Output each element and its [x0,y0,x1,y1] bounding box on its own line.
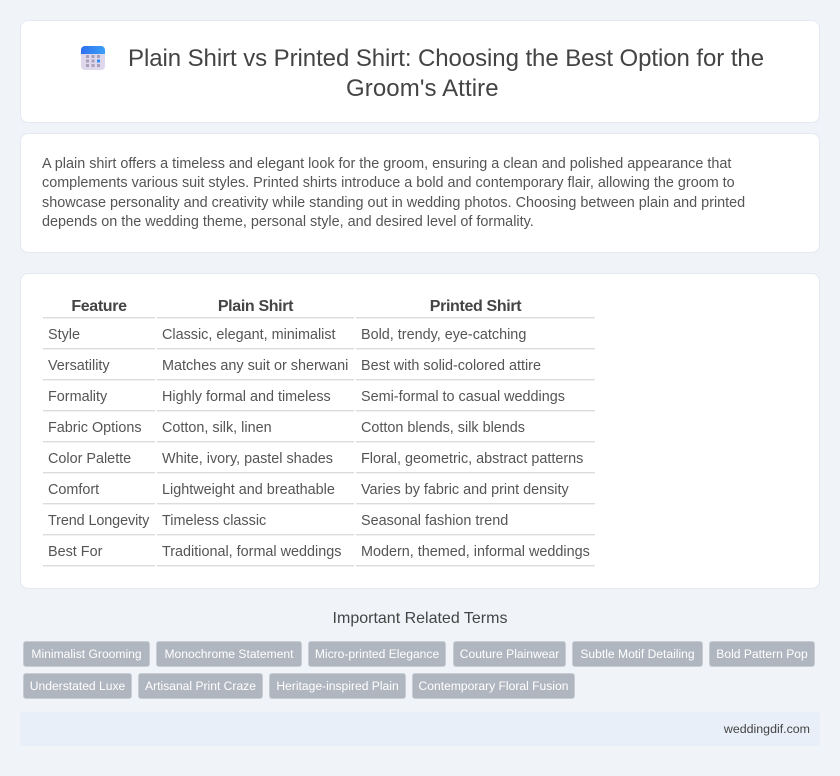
footer source text: weddingdif.com [724,722,810,736]
comparison table [43,298,595,567]
tag [156,641,302,667]
tag: Heritage-inspired Plain [276,679,399,693]
tag: Monochrome Statement [164,647,294,661]
row: Best For: Traditional, formal weddings [162,544,341,560]
row: Trend Longevity: Timeless classic [162,513,266,529]
row: Versatility: Versatility [48,358,110,374]
row: Fabric Options: Fabric Options [48,420,142,436]
row: Fabric Options: Cotton blends, silk blends [361,420,525,436]
tag [269,673,406,699]
footer band [20,712,820,746]
row: Versatility: Matches any suit or sherwani [162,358,348,374]
row: Best For: Best For [48,544,102,560]
tag [412,673,575,699]
row: Comfort: Comfort [48,482,99,498]
row: Best For: Modern, themed, informal weddings [361,544,590,560]
table header row: Plain Shirt [218,298,293,315]
row: Versatility: Best with solid-colored attire [361,358,541,374]
tag [23,673,132,699]
tag: Couture Plainwear [460,647,559,661]
heading: related terms: Important Related Terms [333,610,507,627]
tag [308,641,446,667]
row: Color Palette [48,451,583,467]
icon: calendar [81,46,105,70]
row: Formality: Formality [48,389,107,405]
title: Plain Shirt vs Printed Shirt: Choosing the Best Option for the [128,45,764,72]
text block: summary: complements various suit styles. Printed shirts introduce a bold and contemporary flair, allowing the groom to [42,175,735,191]
row: Comfort [48,482,569,498]
tag [23,641,150,667]
title [128,45,764,102]
row: Fabric Options [48,420,525,436]
row: Color Palette: Floral, geometric, abstract patterns [361,451,583,467]
tag list: related terms [23,641,815,699]
table header row [71,298,522,315]
row: Color Palette: White, ivory, pastel shades [162,451,333,467]
row: Trend Longevity: Seasonal fashion trend [361,513,508,529]
tag: Bold Pattern Pop [716,647,808,661]
row: Comfort: Varies by fabric and print density [361,482,569,498]
row: Comfort: Lightweight and breathable [162,482,335,498]
row: Color Palette: Color Palette [48,451,131,467]
tag: Micro-printed Elegance [315,647,439,661]
row: Style: Style [48,327,80,343]
tag: Subtle Motif Detailing [580,647,695,661]
row: Trend Longevity: Trend Longevity [48,513,149,529]
row: Formality: Highly formal and timeless [162,389,331,405]
text block: summary: depends on the wedding theme, personal style, and desired level of formality. [42,214,534,230]
tag [709,641,815,667]
title: Groom's Attire [346,74,499,102]
row: Style [48,327,526,343]
table header row: Printed Shirt [430,298,521,315]
tag [138,673,263,699]
row: Style: Classic, elegant, minimalist [162,327,336,343]
tag: Artisanal Print Craze [145,679,256,693]
row: Best For [48,544,590,560]
panel: summary card [20,133,820,253]
panel: title card [20,20,820,123]
row: Trend Longevity [48,513,508,529]
table header row: Feature [71,298,127,315]
tag [453,641,566,667]
row: Style: Bold, trendy, eye-catching [361,327,526,343]
text block: summary [42,156,745,230]
row: Formality: Semi-formal to casual weddings [361,389,565,405]
panel: comparison table card [20,273,820,589]
tag: Contemporary Floral Fusion [419,679,568,693]
tag [572,641,703,667]
text block: summary: A plain shirt offers a timeless and elegant look for the groom, ensuring a clean and polished appearance that [42,156,731,172]
row: Versatility [48,358,541,374]
tag: Understated Luxe [30,679,125,693]
row: Formality [48,389,565,405]
row: Fabric Options: Cotton, silk, linen [162,420,272,436]
text block: summary: showcase personality and creativity while standing out in wedding photos. Choosing between plain and printed [42,195,745,211]
tag: Minimalist Grooming [31,647,142,661]
